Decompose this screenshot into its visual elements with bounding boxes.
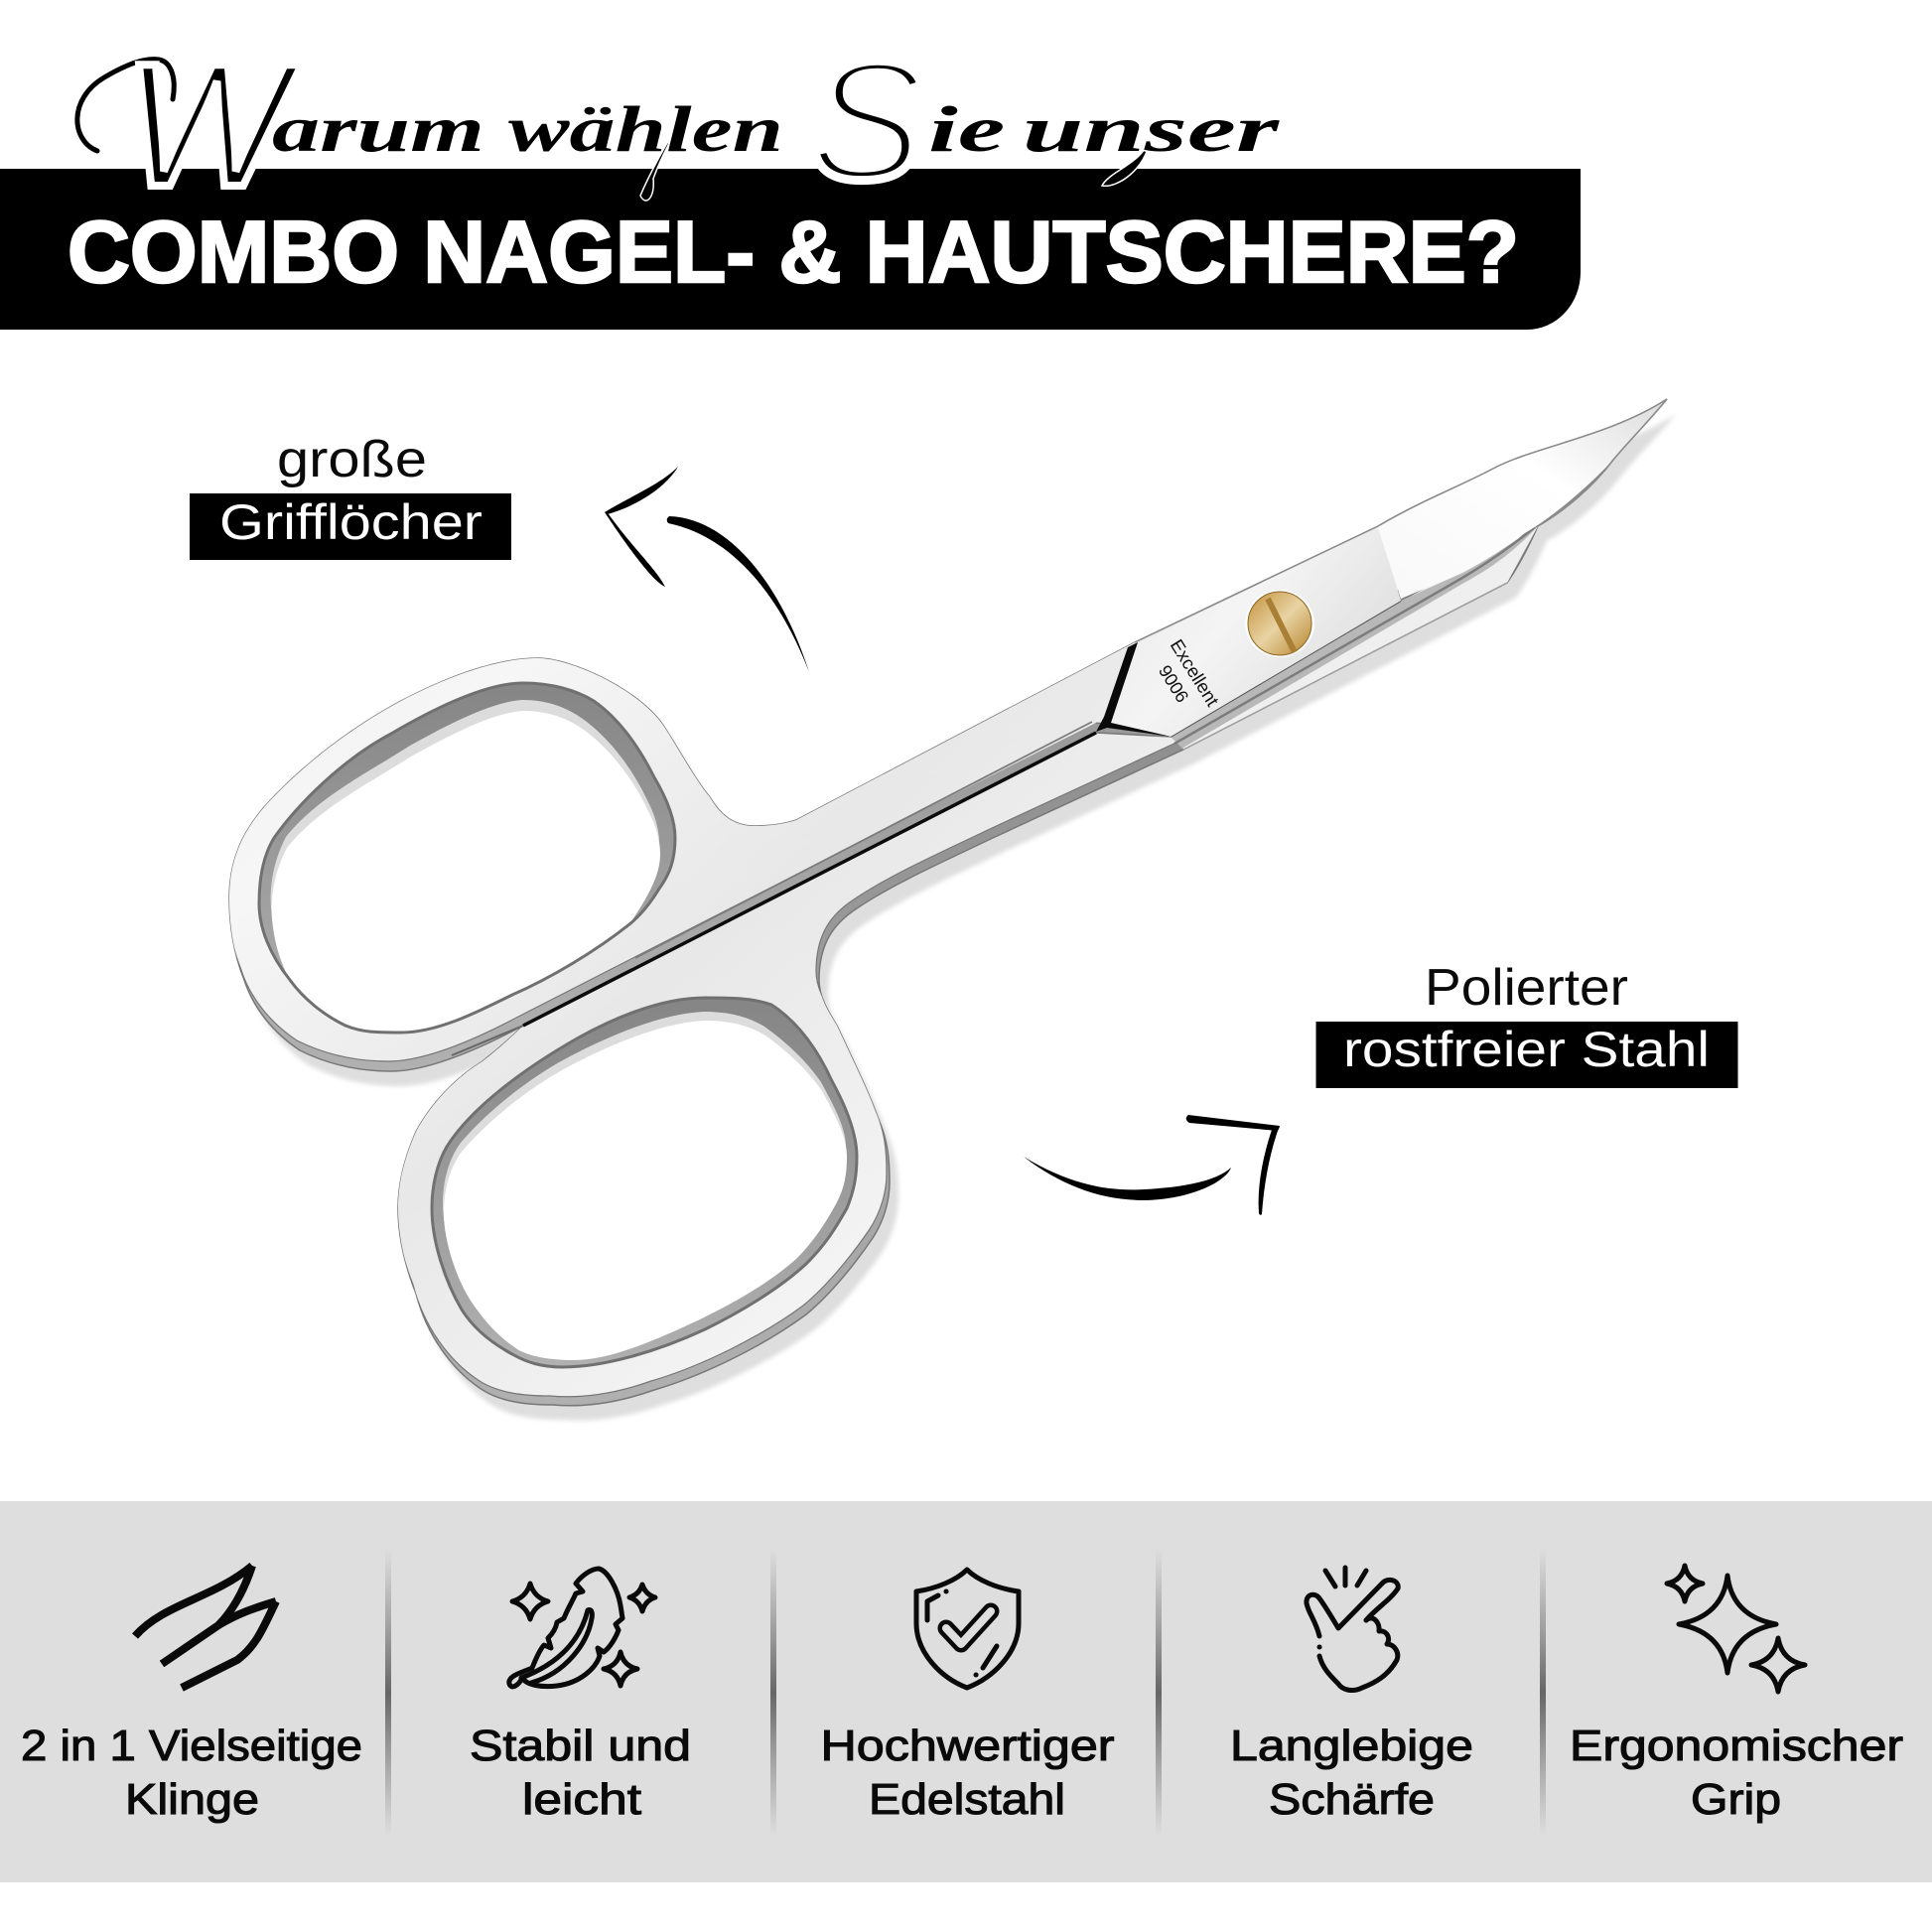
arrow: to handle holes	[605, 467, 809, 672]
label	[1230, 1722, 1473, 1824]
callout: Polierter rostfreier Stahl	[1316, 959, 1737, 1088]
callout: große Grifflöcher	[190, 431, 511, 560]
grip hole: upper	[259, 683, 675, 1033]
callout text: große: große	[277, 431, 427, 488]
scissors shadow	[238, 414, 1676, 1421]
label: Schärfe	[1269, 1775, 1435, 1824]
lower handle and blade	[395, 517, 1538, 1406]
headline: COMBO NAGEL- & HAUTSCHERE?	[68, 203, 1519, 301]
panel: features	[0, 1501, 1932, 1882]
feature: edelstahl	[820, 1570, 1114, 1824]
label: Langlebige	[1230, 1722, 1473, 1770]
callout text: Grifflöcher: Grifflöcher	[219, 494, 483, 550]
label	[1570, 1722, 1903, 1824]
blade top edge	[1135, 399, 1667, 642]
feature: grip	[1570, 1566, 1903, 1824]
dividers	[385, 1549, 1546, 1837]
label: Stabil und	[470, 1722, 691, 1770]
script title: W	[124, 27, 302, 223]
blade bevel bands	[1171, 526, 1538, 750]
feature: schärfe	[1230, 1568, 1473, 1824]
script title: ie	[928, 93, 1032, 166]
heading bar	[0, 169, 1581, 330]
centre split line	[452, 722, 1096, 1055]
callout box: rostfreier Stahl	[1316, 1022, 1737, 1088]
upper handle and blade	[226, 389, 1667, 1071]
pivot plate	[1110, 526, 1401, 737]
icon: feather with sparkles	[509, 1569, 655, 1687]
blade	[1378, 399, 1667, 599]
callout box: Grifflöcher	[190, 493, 511, 560]
script title: arum	[272, 93, 508, 166]
engraving: Excellent	[1167, 635, 1223, 710]
label: 2 in 1 Vielseitige	[21, 1722, 362, 1770]
script title: unser	[1023, 93, 1281, 166]
icon: shield with check	[916, 1570, 1019, 1688]
arrow: to steel	[1024, 1115, 1280, 1215]
grip hole: lower	[432, 998, 857, 1367]
engraving: 9006	[1155, 662, 1192, 706]
feature: 2 in 1	[21, 1566, 362, 1824]
icon: tweezers blades	[135, 1566, 276, 1688]
script title	[77, 27, 1281, 223]
script title: wählen	[508, 93, 806, 166]
label: Grip	[1691, 1775, 1781, 1824]
icon: sparkles	[1667, 1566, 1805, 1692]
label: Edelstahl	[869, 1775, 1065, 1824]
script title: S	[810, 27, 923, 215]
label: Hochwertiger	[820, 1722, 1114, 1770]
feature: stabil	[470, 1569, 691, 1824]
pivot screw	[1245, 590, 1314, 657]
label	[470, 1722, 691, 1824]
label: Klinge	[125, 1775, 259, 1824]
callout text: Polierter: Polierter	[1425, 959, 1628, 1017]
black step at pivot	[1096, 642, 1172, 737]
label: Ergonomischer	[1570, 1722, 1903, 1770]
callout text: rostfreier Stahl: rostfreier Stahl	[1343, 1022, 1710, 1077]
label: leicht	[522, 1775, 641, 1824]
icon: finger snap	[1307, 1568, 1398, 1691]
label	[820, 1722, 1114, 1824]
label	[21, 1722, 362, 1824]
scissors	[226, 389, 1676, 1421]
